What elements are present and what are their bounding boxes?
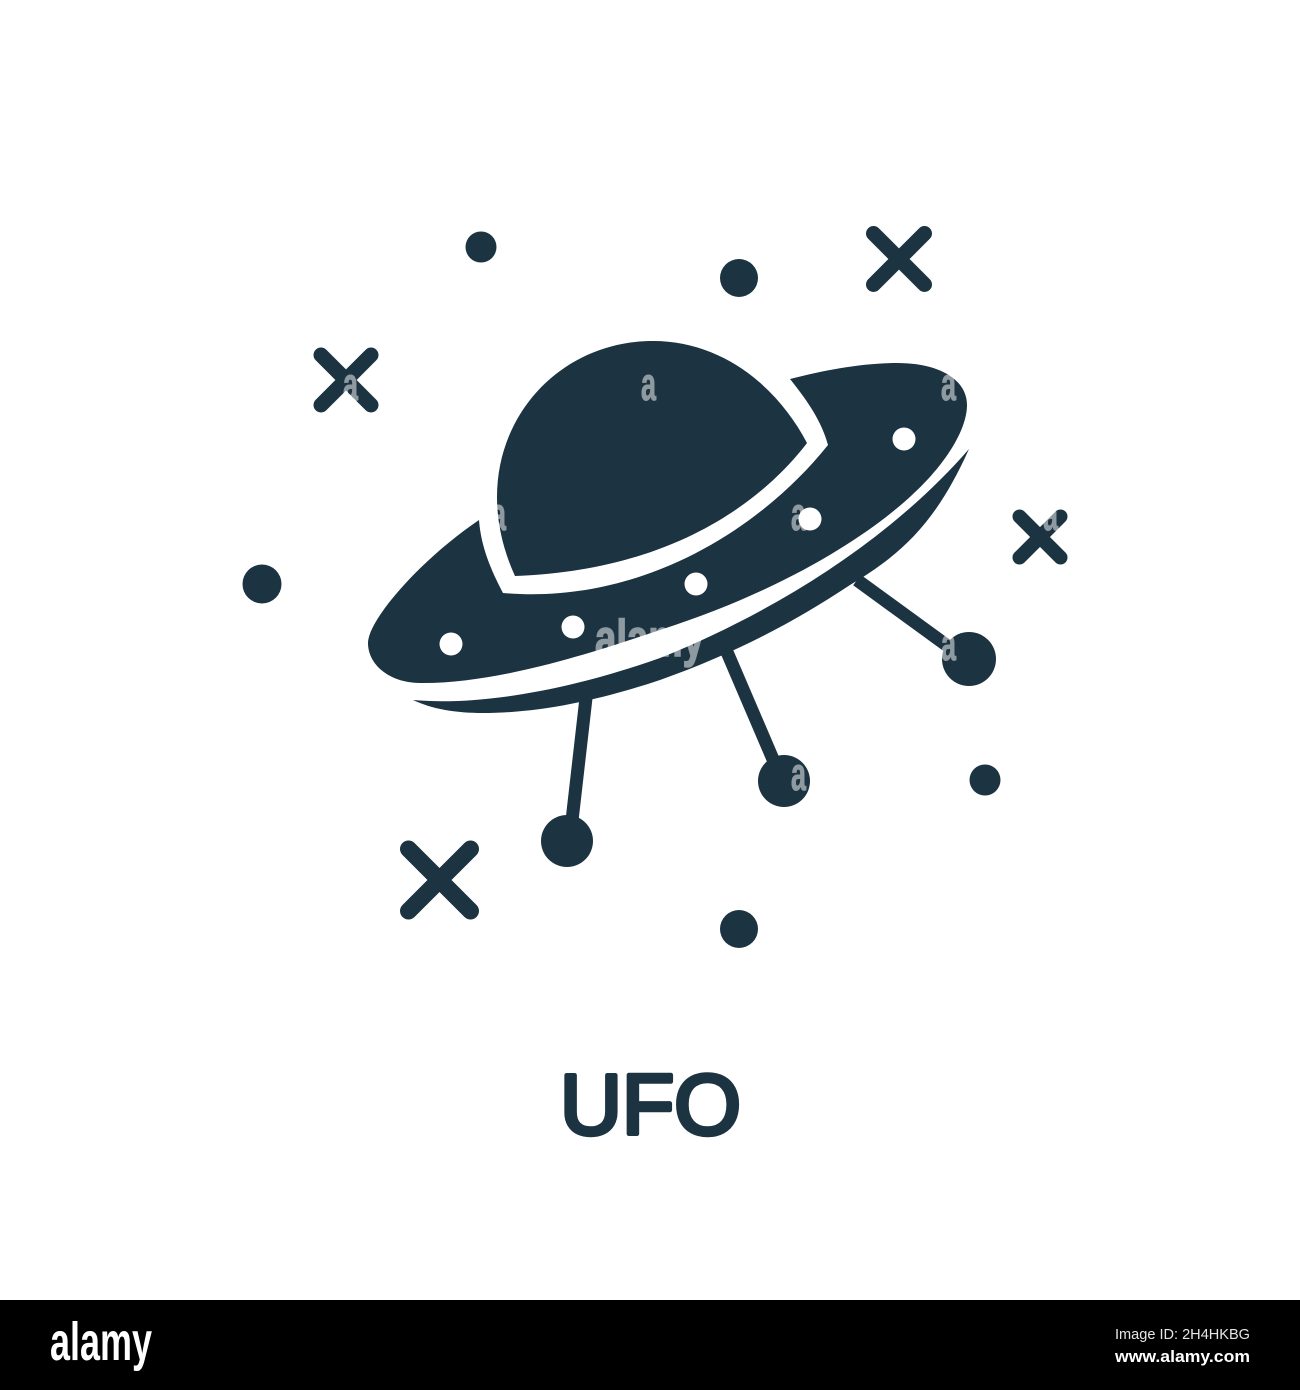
ufo saucer xyxy=(368,363,967,683)
title: UFO xyxy=(560,1058,741,1153)
icon: UFO xyxy=(368,341,996,867)
ufo windows xyxy=(440,428,916,656)
footer bar xyxy=(0,1300,1300,1390)
website: www.alamy.com xyxy=(1114,1347,1250,1366)
ufo dome xyxy=(497,341,807,576)
ufo lower crescent xyxy=(413,449,969,713)
image id: Image ID: 2H4HKBG xyxy=(1115,1326,1250,1343)
watermarks: a xyxy=(491,488,506,540)
watermarks: a xyxy=(641,358,656,410)
watermarks: a xyxy=(791,488,806,540)
watermarks: alamy xyxy=(595,610,704,668)
watermarks: a xyxy=(941,618,956,670)
watermarks: a xyxy=(791,748,806,800)
watermarks: a xyxy=(1043,488,1058,540)
icon: star dots xyxy=(242,232,1000,948)
watermarks: a xyxy=(941,358,956,410)
icon: star crosses xyxy=(321,234,1060,911)
footer logo: alamy xyxy=(50,1312,152,1372)
ufo legs xyxy=(570,580,960,838)
watermarks xyxy=(343,358,1058,800)
ufo leg balls xyxy=(541,632,996,867)
watermarks: a xyxy=(343,358,358,410)
